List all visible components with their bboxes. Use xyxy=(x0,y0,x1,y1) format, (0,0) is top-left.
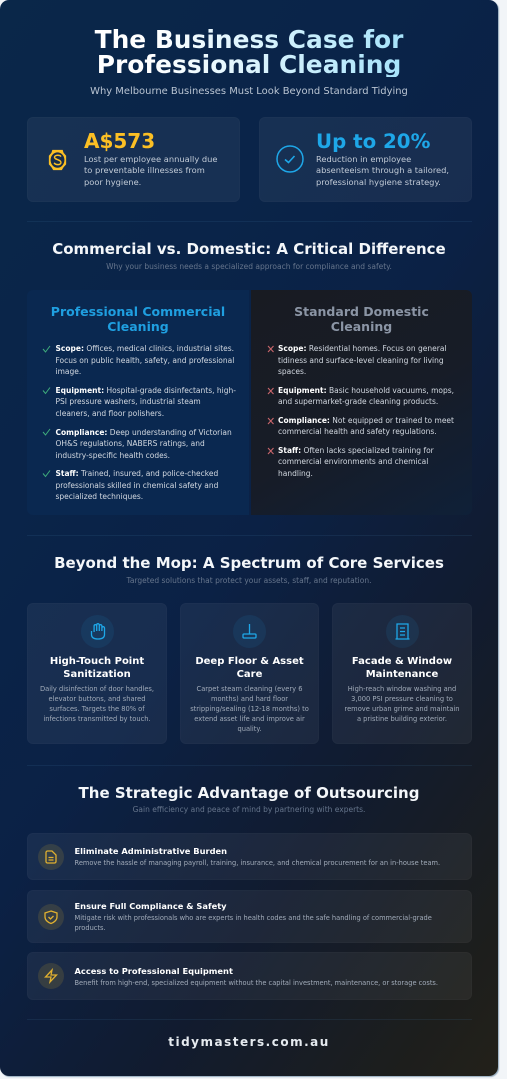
benefit description: Remove the hassle of managing payroll, training, insurance, and chemical procurement for an in-house team. xyxy=(74,858,440,866)
list item: scope xyxy=(56,344,234,376)
benefit row: compliance xyxy=(27,890,472,943)
list item: equipment: cleaners, and floor polishers. xyxy=(56,409,164,418)
section heading: services: Beyond the Mop: A Spectrum of Core Services xyxy=(54,554,444,572)
list item: scope xyxy=(278,344,447,376)
card title xyxy=(352,656,452,680)
icon: check circle xyxy=(276,145,304,173)
stat description: poor hygiene. xyxy=(84,177,141,187)
stat description: Reduction in employee xyxy=(316,154,411,164)
card title: Deep Floor & Asset xyxy=(195,656,304,666)
card description: 3,000 PSI pressure cleaning to xyxy=(351,694,453,702)
icon: money badge xyxy=(48,150,66,170)
card description: stripping/sealing (12-18 months) to xyxy=(190,704,309,712)
card title: Maintenance xyxy=(366,669,438,680)
benefit description: Mitigate risk with professionals who are experts in health codes and the safe handling of commercial-grade xyxy=(74,914,432,922)
title: The Business Case for xyxy=(95,25,403,54)
section subheading: Why your business needs a specialized approach for compliance and safety. xyxy=(106,262,392,271)
list item: equipment: and supermarket-grade cleaning products. xyxy=(278,397,438,406)
card description: infections transmitted by touch. xyxy=(43,714,151,722)
list item: equipment: Equipment: Basic household vacuums, mops, xyxy=(278,386,454,394)
icon: floor mop xyxy=(232,615,266,648)
title xyxy=(0,27,498,77)
card description: Daily disinfection of door handles, xyxy=(40,684,154,692)
list item: compliance: OH&S regulations, NABERS ratings, and xyxy=(56,439,205,448)
list item: compliance: industry-specific health codes. xyxy=(56,451,170,460)
stat description: Lost per employee annually due xyxy=(84,154,218,164)
title: Professional Cleaning xyxy=(97,50,401,79)
list item: scope: spaces. xyxy=(278,367,306,376)
panel heading: Professional Commercial xyxy=(51,304,225,318)
list item: staff: handling. xyxy=(278,469,313,478)
list item: scope: Focus on public health, safety, and professional xyxy=(56,356,234,365)
list item: compliance xyxy=(56,428,232,460)
card description: remove urban grime and maintain xyxy=(344,704,460,712)
list item: staff xyxy=(56,469,218,501)
card description: High-reach window washing and xyxy=(348,684,456,692)
stat value: Up to 20% xyxy=(316,130,430,153)
card title: High-Touch Point xyxy=(50,656,144,666)
card description xyxy=(190,684,309,732)
card description: surfaces. Targets the 80% of xyxy=(49,704,145,712)
service card: floor xyxy=(180,603,319,744)
checks xyxy=(42,346,50,478)
section heading: comparison: Commercial vs. Domestic: A Critical Difference xyxy=(52,240,446,258)
card description: quality. xyxy=(237,724,262,732)
panel heading: Cleaning xyxy=(331,318,392,334)
section heading: outsourcing: The Strategic Advantage of Outsourcing xyxy=(79,784,419,802)
list item: compliance: commercial health and safety regulations. xyxy=(278,427,437,436)
stat description xyxy=(84,154,218,187)
benefit title: Access to Professional Equipment xyxy=(74,966,233,976)
section subheading: Targeted solutions that protect your assets, staff, and reputation. xyxy=(127,576,371,585)
list item: equipment: Equipment: Hospital-grade disinfectants, high- xyxy=(56,386,236,394)
card description: Carpet steam cleaning (every 6 xyxy=(197,684,302,692)
list item: compliance xyxy=(278,416,454,436)
icon: lightning xyxy=(38,963,64,989)
stat description: to preventable illnesses from xyxy=(84,165,205,175)
benefit row: equipment xyxy=(27,952,472,1000)
card description: months) and hard floor xyxy=(211,694,288,702)
list item: scope: image. xyxy=(56,367,81,376)
panel heading: Cleaning xyxy=(107,318,169,334)
benefit description: Benefit from high-end, specialized equipment without the capital investment, maintenance, or storage costs. xyxy=(74,978,438,986)
panel heading: Standard Domestic xyxy=(294,304,429,318)
stat card: A$573 xyxy=(27,117,240,202)
list item: staff: commercial environments and chemical xyxy=(278,457,428,466)
benefit row: admin xyxy=(27,833,472,880)
card description: extend asset life and improve air xyxy=(194,714,305,722)
benefit title: Ensure Full Compliance & Safety xyxy=(74,900,227,910)
stat card: up to 20% xyxy=(259,117,472,202)
icon: document xyxy=(38,844,64,870)
icon: building xyxy=(386,615,418,648)
card title: Facade & Window xyxy=(352,656,452,666)
card title xyxy=(195,656,304,680)
list item: compliance: Compliance: Deep understanding of Victorian xyxy=(56,428,232,436)
card description xyxy=(344,684,460,722)
card description: elevator buttons, and shared xyxy=(48,694,146,702)
list item: scope: Scope: Residential homes. Focus on general xyxy=(278,344,447,353)
icon: hand xyxy=(80,615,114,648)
list item: staff: Staff: Trained, insured, and police-checked xyxy=(56,469,218,478)
crosses xyxy=(268,346,274,454)
list item: equipment xyxy=(278,386,454,406)
list item: equipment: PSI pressure washers, industrial steam xyxy=(56,397,201,406)
service card: facade xyxy=(332,603,472,744)
stat value: A$573 xyxy=(84,129,155,153)
list item: scope: tidiness and surface-level cleaning for living xyxy=(278,356,444,365)
list item: compliance: Compliance: Not equipped or trained to meet xyxy=(278,416,454,424)
panel heading xyxy=(294,304,429,334)
card title xyxy=(50,656,144,680)
panel: professional commercial xyxy=(27,290,249,515)
footer url: tidymasters.com.au xyxy=(168,1034,330,1048)
list item: scope: Scope: Offices, medical clinics, industrial sites. xyxy=(56,344,234,353)
stat description: professional hygiene strategy. xyxy=(316,177,441,187)
stat description: absenteeism through a tailored, xyxy=(316,165,449,175)
card title: Sanitization xyxy=(63,669,131,680)
stat description xyxy=(316,154,449,187)
list item: staff: professionals skilled in chemical safety and xyxy=(56,481,218,490)
section subheading: Gain efficiency and peace of mind by partnering with experts. xyxy=(133,805,365,814)
list item: staff: Staff: Often lacks specialized training for xyxy=(278,446,434,454)
benefit title: Eliminate Administrative Burden xyxy=(74,846,227,856)
panel heading xyxy=(51,304,225,334)
benefit description: products. xyxy=(74,924,106,932)
card description xyxy=(40,684,154,722)
panel: standard domestic xyxy=(251,290,472,515)
card title: Care xyxy=(237,669,262,680)
card description: a pristine building exterior. xyxy=(357,714,447,722)
subtitle: Why Melbourne Businesses Must Look Beyond Standard Tidying xyxy=(90,86,408,96)
benefit description xyxy=(74,914,432,932)
icon: shield xyxy=(38,904,64,930)
list item: equipment xyxy=(56,386,236,418)
list item: staff xyxy=(278,446,434,478)
service card: high-touch xyxy=(27,603,167,744)
list item: staff: specialized techniques. xyxy=(56,492,143,501)
